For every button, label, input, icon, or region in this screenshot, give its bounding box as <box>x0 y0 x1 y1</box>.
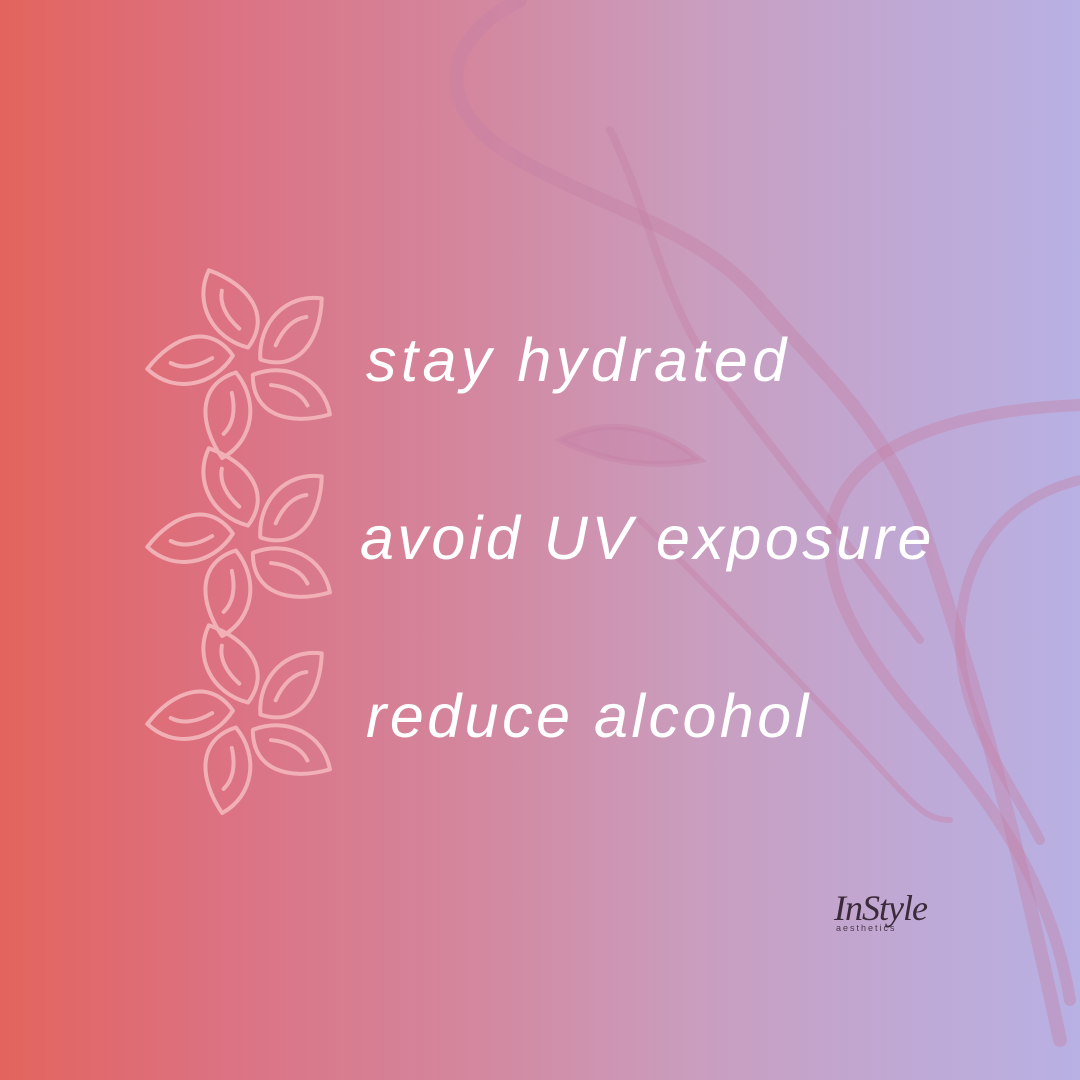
logo: InStyle aesthetics: aesthetics <box>836 923 897 933</box>
text: stay hydrated: stay hydrated <box>366 326 791 394</box>
text: reduce alcohol: reduce alcohol <box>366 682 812 750</box>
logo: InStyle aesthetics: InStyle <box>834 888 927 928</box>
text: avoid UV exposure: avoid UV exposure <box>360 504 935 572</box>
